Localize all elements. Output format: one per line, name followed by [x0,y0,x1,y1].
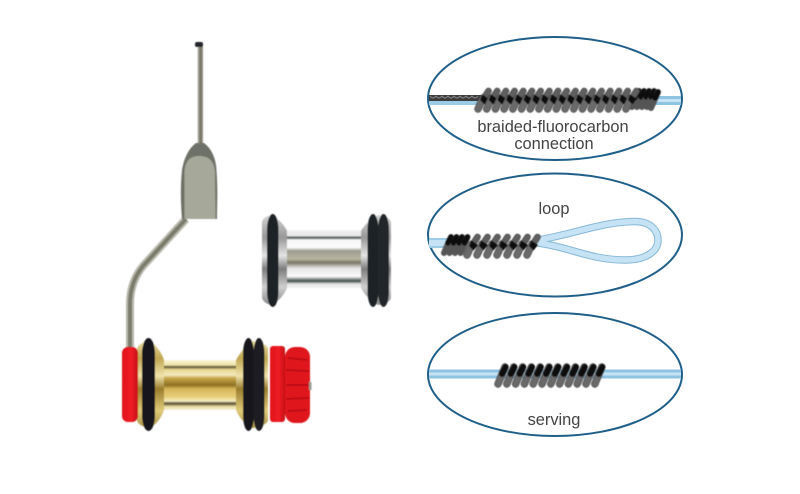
needle head [181,143,217,219]
left flange [262,215,287,305]
panel: loop [428,174,682,296]
thread serving [478,91,658,109]
barrel [283,230,364,288]
icon: needle tool with wire arm [130,42,217,350]
needle tip [195,42,203,47]
left red cap [122,347,138,422]
red disc [270,346,285,422]
icon: gold spool with red caps [122,338,312,431]
fluorocarbon line [429,370,681,378]
panel: serving [428,313,682,436]
wire arm [130,219,186,350]
right flange [361,215,391,305]
left flange [137,341,164,428]
label: braided-fluorocarbon [477,118,629,136]
label: loop [538,200,570,218]
label: serving [528,411,580,429]
red knurled knob [285,347,312,423]
left o-ring [267,214,278,307]
icon: silver spool [262,214,391,307]
thread serving [444,237,538,255]
label line 2: connection [514,135,594,153]
right flange [236,341,268,428]
right o-rings [368,214,378,307]
panel: braided-fluorocarbon connection [428,37,682,160]
braided line [429,95,481,101]
oval frame [428,174,682,296]
line with loop [429,222,658,260]
oval frame [428,313,682,436]
barrel [160,360,240,410]
left o-ring [142,338,155,431]
fluorocarbon line [429,96,681,105]
thread serving [498,367,602,384]
needle rod [198,45,203,144]
oval frame [428,37,682,160]
right o-rings [243,338,254,431]
